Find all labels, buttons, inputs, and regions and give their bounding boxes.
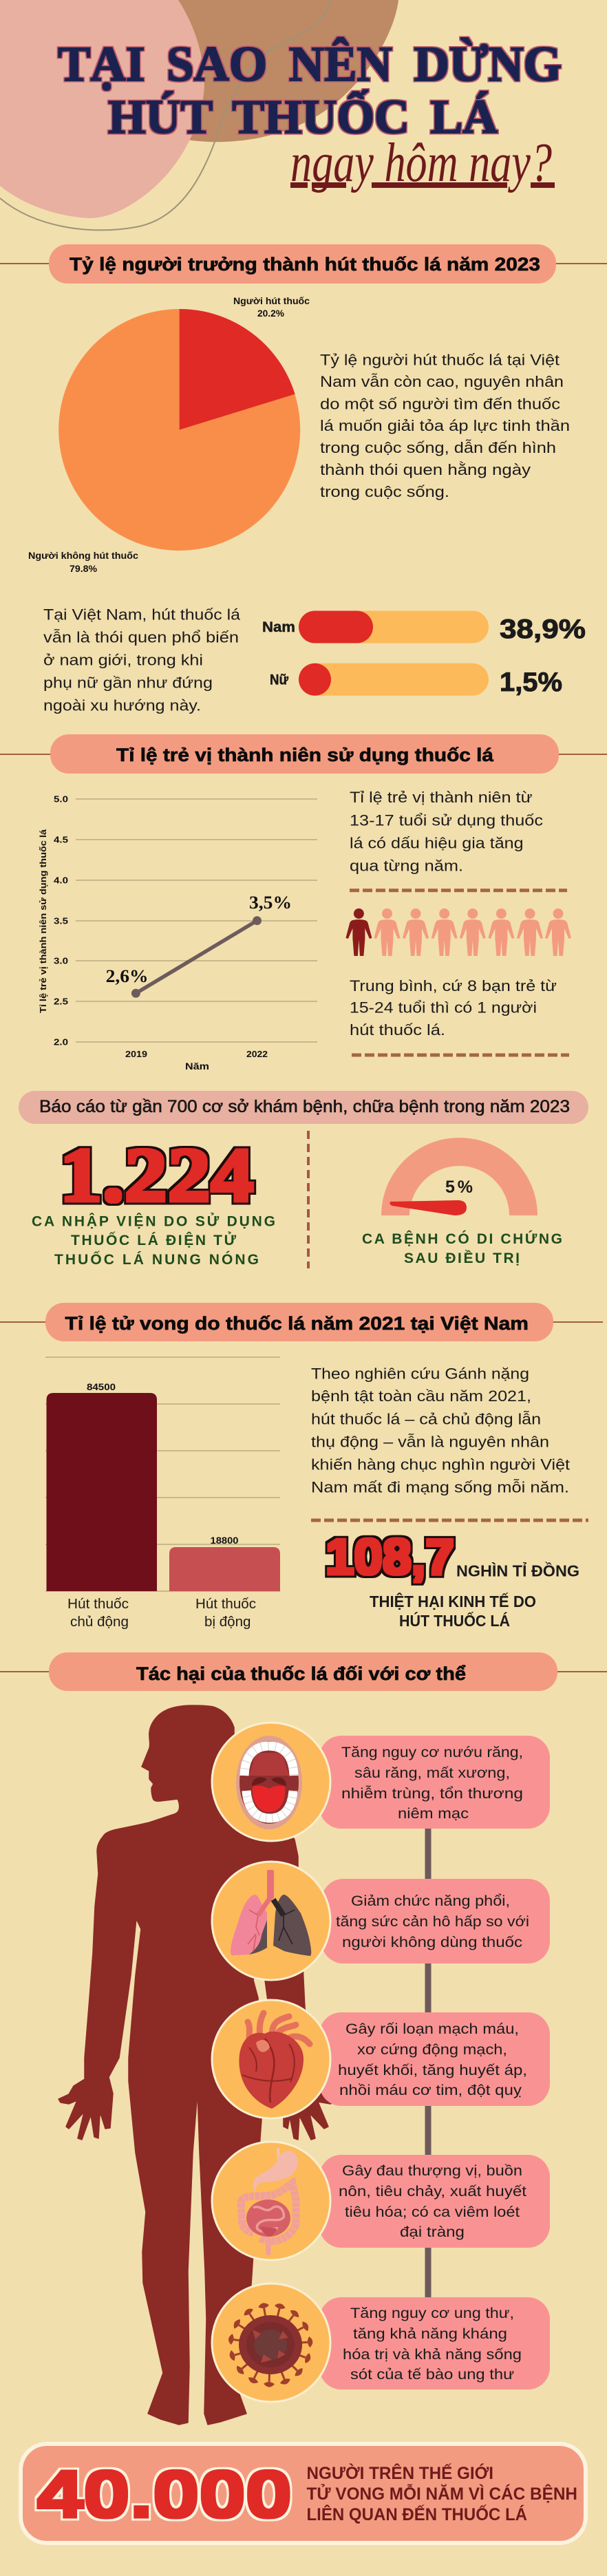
line chart: Tỉ lệ trẻ vị thành niên sử dụng thuốc lá bbox=[38, 829, 48, 1013]
bar chart: deaths: chủ động bbox=[70, 1615, 129, 1630]
line chart: 2.5 bbox=[54, 997, 68, 1006]
text block: global burden study: khiến hàng chục nghìn người Việt bbox=[311, 1456, 571, 1473]
bar chart: deaths: 84500 bbox=[87, 1381, 116, 1392]
icon: lungs bbox=[212, 1862, 330, 1980]
footer caption: NGƯỜI TRÊN THẾ GIỚI bbox=[307, 2462, 493, 2483]
bar chart: deaths: bị động bbox=[204, 1615, 251, 1630]
pie chart bbox=[28, 295, 310, 574]
text block: gender habit: vẫn là thói quen phổ biến bbox=[43, 628, 239, 646]
effect box: mouth: sâu răng, mất xương, bbox=[354, 1765, 510, 1781]
stat: 108,7 economic loss: NGHÌN TỈ ĐỒNG bbox=[456, 1561, 579, 1580]
title bbox=[58, 36, 562, 144]
footer caption bbox=[307, 2462, 577, 2524]
effect box: cancer bbox=[319, 2297, 550, 2389]
stat: 1.224 hospital admissions: THUỐC LÁ NUNG NÓNG bbox=[54, 1251, 259, 1268]
effect box: mouth bbox=[319, 1736, 550, 1829]
line chart: Năm bbox=[185, 1061, 209, 1072]
text block: global burden study: hút thuốc lá – cả chủ động lẫn bbox=[311, 1410, 541, 1427]
text block: teen trend: 13-17 tuổi sử dụng thuốc bbox=[350, 811, 543, 829]
gender bar chart bbox=[262, 611, 586, 697]
effect box: cancer: Tăng nguy cơ ung thư, bbox=[350, 2306, 514, 2321]
stat: 108,7 economic loss: THIỆT HẠI KINH TẾ DO bbox=[370, 1592, 536, 1610]
effect box: heart: huyết khối, tăng huyết áp, bbox=[338, 2063, 527, 2078]
text block: one in eight: 15-24 tuổi thì có 1 người bbox=[350, 999, 537, 1016]
footer caption: TỬ VONG MỖI NĂM VÌ CÁC BỆNH bbox=[307, 2483, 577, 2504]
line chart: 2022 bbox=[246, 1049, 268, 1059]
effect box: lungs: tăng sức cản hô hấp so với bbox=[336, 1914, 529, 1930]
heading: adult smoking rate: Tỷ lệ người trưởng thành hút thuốc lá năm 2023 bbox=[70, 254, 540, 275]
text block: smoking causes: thành thói quen hằng ngày bbox=[320, 461, 531, 478]
text block: one in eight bbox=[350, 977, 569, 1055]
heading: adolescent rate: Tỉ lệ trẻ vị thành niên sử dụng thuốc lá bbox=[116, 745, 494, 765]
bar chart: deaths: Hút thuốc bbox=[67, 1597, 129, 1612]
line chart: 4.5 bbox=[54, 834, 68, 845]
stat: 1.224 hospital admissions bbox=[32, 1133, 275, 1268]
line chart: 4.0 bbox=[54, 875, 68, 885]
effect box: cancer: tăng khả năng kháng bbox=[353, 2326, 507, 2342]
body silhouette bbox=[58, 1705, 339, 2425]
text block: gender habit: phụ nữ gần như đứng bbox=[43, 674, 213, 691]
text block: smoking causes: Tỷ lệ người hút thuốc lá tại Việt bbox=[320, 352, 560, 369]
effect box: heart: Gây rối loạn mạch máu, bbox=[345, 2021, 519, 2037]
line chart: 3.0 bbox=[54, 955, 68, 966]
text block: teen trend: lá có dấu hiệu gia tăng bbox=[350, 835, 524, 852]
text block: smoking causes: do một số người tìm đến thuốc bbox=[320, 395, 560, 412]
pie chart: Người hút thuốc bbox=[233, 295, 310, 306]
text block: one in eight: hút thuốc lá. bbox=[350, 1021, 445, 1039]
bar chart: deaths bbox=[45, 1357, 280, 1630]
icon: cancer cell bbox=[212, 2284, 330, 2402]
stat: 1.224 hospital admissions: THUỐC LÁ ĐIỆN TỬ bbox=[71, 1232, 237, 1248]
text block: gender habit: ở nam giới, trong khi bbox=[43, 651, 203, 668]
heading: deaths 2021: Tỉ lệ tử vong do thuốc lá năm 2021 tại Việt Nam bbox=[65, 1313, 529, 1334]
text block: global burden study: bệnh tật toàn cầu năm 2021, bbox=[311, 1387, 531, 1405]
gauge: 5%: CA BỆNH CÓ DI CHỨNG bbox=[362, 1231, 562, 1247]
heading: hospital report bbox=[19, 1091, 588, 1124]
effect box: mouth: niêm mạc bbox=[398, 1806, 469, 1822]
pie chart: 79.8% bbox=[70, 563, 98, 574]
bar chart: deaths: 18800 bbox=[211, 1535, 239, 1546]
text block: teen trend: qua từng năm. bbox=[350, 858, 463, 875]
text block: gender habit bbox=[43, 606, 241, 714]
stat: 1.224 hospital admissions: CA NHẬP VIỆN DO SỬ DỤNG bbox=[32, 1213, 275, 1230]
icon: heart bbox=[212, 2000, 330, 2118]
line chart: 5.0 bbox=[54, 794, 68, 804]
text block: gender habit: Tại Việt Nam, hút thuốc lá bbox=[43, 606, 241, 624]
effect box: lungs: người không dùng thuốc bbox=[342, 1935, 522, 1950]
gauge: 5%: SAU ĐIỀU TRỊ bbox=[404, 1250, 520, 1266]
gender bar chart: Nam bbox=[262, 619, 295, 635]
gender bar chart: 1,5% bbox=[500, 668, 562, 697]
heading: harm to body bbox=[0, 1652, 607, 1691]
text block: teen trend: Tỉ lệ trẻ vị thành niên từ bbox=[350, 789, 533, 806]
pie chart: Người không hút thuốc bbox=[28, 550, 138, 561]
heading: harm to body: Tác hại của thuốc lá đối với cơ thể bbox=[136, 1663, 466, 1684]
footer stat panel bbox=[21, 2444, 586, 2543]
effect box: cancer: hóa trị và khả năng sống bbox=[343, 2347, 522, 2363]
line chart: 2019 bbox=[125, 1049, 147, 1059]
bar chart: deaths: Hút thuốc bbox=[195, 1597, 256, 1612]
line chart: 3.5 bbox=[54, 915, 68, 926]
effect box: heart: nhồi máu cơ tim, đột quỵ bbox=[339, 2083, 522, 2098]
heading: adolescent rate bbox=[0, 734, 607, 774]
text block: gender habit: ngoài xu hướng này. bbox=[43, 696, 201, 714]
text block: smoking causes: Nam vẫn còn cao, nguyên nhân bbox=[320, 373, 564, 390]
text block: smoking causes bbox=[320, 352, 570, 500]
footer caption: LIÊN QUAN ĐẾN THUỐC LÁ bbox=[307, 2504, 527, 2524]
effect box: heart bbox=[319, 2012, 550, 2106]
text block: global burden study: thụ động – vẫn là nguyên nhân bbox=[311, 1433, 549, 1450]
line chart: 2,6% bbox=[106, 966, 149, 986]
gauge: 5%: 5% bbox=[445, 1178, 473, 1197]
effect box: cancer: sót của tế bào ung thư bbox=[350, 2367, 514, 2383]
icon: digestive system bbox=[212, 2142, 330, 2260]
gauge: 5% bbox=[362, 1138, 562, 1266]
text block: smoking causes: trong cuộc sống, dẫn đến hình bbox=[320, 439, 556, 456]
effect box: mouth: Tăng nguy cơ nướu răng, bbox=[341, 1745, 523, 1760]
text block: one in eight: Trung bình, cứ 8 bạn trẻ từ bbox=[350, 977, 557, 994]
effect box: lungs bbox=[321, 1879, 550, 1963]
heading: deaths 2021 bbox=[0, 1303, 603, 1341]
effect box: mouth: nhiễm trùng, tổn thương bbox=[341, 1786, 523, 1802]
gender bar chart: Nữ bbox=[270, 672, 289, 688]
gender bar chart: 38,9% bbox=[500, 615, 586, 644]
connector line bbox=[425, 1824, 431, 2302]
line chart: 3,5% bbox=[249, 893, 292, 913]
effect box: digestive bbox=[319, 2155, 550, 2248]
pie chart: 20.2% bbox=[257, 308, 285, 319]
stat: 1.224 hospital admissions: 1.224 bbox=[59, 1133, 254, 1218]
text block: teen trend bbox=[350, 789, 567, 891]
effect box: digestive: Gây đau thượng vị, buồn bbox=[342, 2163, 522, 2179]
line chart bbox=[38, 794, 317, 1072]
pictogram: 1 of 8 people bbox=[345, 908, 571, 956]
stat: 108,7 economic loss: HÚT THUỐC LÁ bbox=[399, 1611, 510, 1630]
effect box: lungs: Giảm chức năng phổi, bbox=[351, 1893, 510, 1909]
heading: adult smoking rate bbox=[0, 244, 607, 284]
icon: mouth bbox=[212, 1723, 330, 1841]
header decoration shapes bbox=[0, 0, 398, 230]
text block: global burden study bbox=[311, 1365, 588, 1520]
text block: global burden study: Theo nghiên cứu Gánh nặng bbox=[311, 1365, 529, 1382]
title: TẠI SAO NÊN DỪNG bbox=[58, 36, 562, 92]
effect box: digestive: nôn, tiêu chảy, xuất huyết bbox=[339, 2184, 526, 2200]
effect box: heart: xơ cứng động mạch, bbox=[357, 2042, 507, 2058]
footer number: 40.000 bbox=[37, 2458, 292, 2531]
heading: hospital report: Báo cáo từ gần 700 cơ sở khám bệnh, chữa bệnh trong năm 2023 bbox=[39, 1097, 570, 1116]
stat: 108,7 economic loss: 108,7 bbox=[326, 1530, 454, 1585]
text block: global burden study: Nam mất đi mạng sống mỗi năm. bbox=[311, 1478, 569, 1495]
text block: smoking causes: trong cuộc sống. bbox=[320, 483, 449, 500]
stat: 108,7 economic loss bbox=[326, 1530, 579, 1630]
effect box: digestive: đại tràng bbox=[400, 2224, 465, 2240]
text block: smoking causes: lá muốn giải tỏa áp lực tinh thần bbox=[320, 417, 570, 434]
title: HÚT THUỐC LÁ bbox=[108, 89, 498, 144]
effect box: digestive: tiêu hóa; có ca viêm loét bbox=[345, 2204, 520, 2220]
line chart: 2.0 bbox=[54, 1036, 68, 1047]
